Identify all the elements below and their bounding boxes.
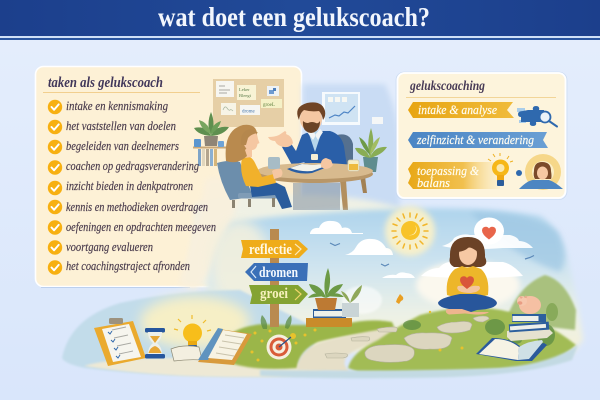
checklist of tasks: het vaststellen van doelen [66,118,176,133]
sky [205,208,583,355]
header banner [0,0,600,40]
icon: hourglass [145,328,165,358]
bottom shoreline [260,345,578,378]
wall chart [322,92,383,125]
heading: gelukscoaching [409,78,485,93]
grass [348,308,576,372]
white glow behind woman [416,261,520,309]
stepping stones [325,316,489,362]
green mound by signpost [219,320,396,369]
corkboard with notes: Leker [239,87,250,92]
sun [385,206,435,256]
client [217,125,292,209]
signpost [241,229,308,327]
illustration: coaching conversation [193,79,387,210]
checklist of tasks: inzicht bieden in denkpatronen [66,178,193,193]
ribbon: intake & analyse: intake & analyse [418,102,497,117]
flowers [250,311,464,362]
sign: groei: groei [260,286,288,302]
text: taken als gelukscoach [43,75,216,275]
stacked books and right open book [476,314,553,361]
icon: light bulb [488,153,513,186]
plant behind table [355,128,387,172]
ribbon: toepassing & balans: toepassing & [417,163,480,178]
birds [330,243,534,266]
title: wat doet een gelukscoach? [158,2,430,32]
panel: taken als gelukscoach background [36,66,302,288]
sign: dromen: dromen [259,265,298,281]
coach [268,102,353,210]
ribbon: zelfinzicht & verandering: zelfinzicht & verandering [416,132,534,147]
lower left ground [62,290,320,377]
corkboard with notes: groeL [263,103,275,108]
green shrubs [261,303,558,346]
icon: puzzle and magnifier [517,106,557,126]
checklist of tasks [48,98,216,275]
icon: butterfly [396,294,403,304]
checklist of tasks: voortgang evalueren [66,239,153,254]
icon: target [266,334,292,360]
speech bubble with heart [474,218,504,244]
hill [505,275,576,330]
heading: taken als gelukscoach [48,75,163,91]
checklist of tasks: oefeningen en opdrachten meegeven [66,219,216,234]
panel: gelukscoaching [396,72,567,200]
corkboard with notes [213,79,284,127]
checklist of tasks: intake en kennismaking [66,98,168,113]
sign: reflectie: reflectie [249,242,292,258]
round table with notebook and cups [257,157,373,210]
ribbon: toepassing & balans: balans [417,175,450,190]
shelf with plant [193,112,229,166]
illustration: misty backdrop joining office and landscape [178,84,400,290]
checklist of tasks: kennis en methodieken overdragen [66,199,208,214]
icon: clipboard [94,318,146,366]
piggy bank [517,295,541,314]
corkboard with notes: drome [242,110,256,114]
checklist of tasks: begeleiden van deelnemers [66,138,179,153]
checklist of tasks: het coachingstraject afronden [66,258,190,273]
landscape illustration [62,206,583,378]
clouds [310,221,533,314]
potted plant on books [306,268,362,327]
icon: woman with sun [516,154,563,190]
meditating woman [438,237,497,315]
gravel path [297,327,402,372]
corkboard with notes: Bleegi [239,93,252,98]
icon: glowing light bulb [174,315,211,351]
checklist of tasks: coachen op gedragsverandering [66,158,199,173]
ribbon: toepassing & balans [408,162,500,190]
icon: open books [171,328,252,365]
